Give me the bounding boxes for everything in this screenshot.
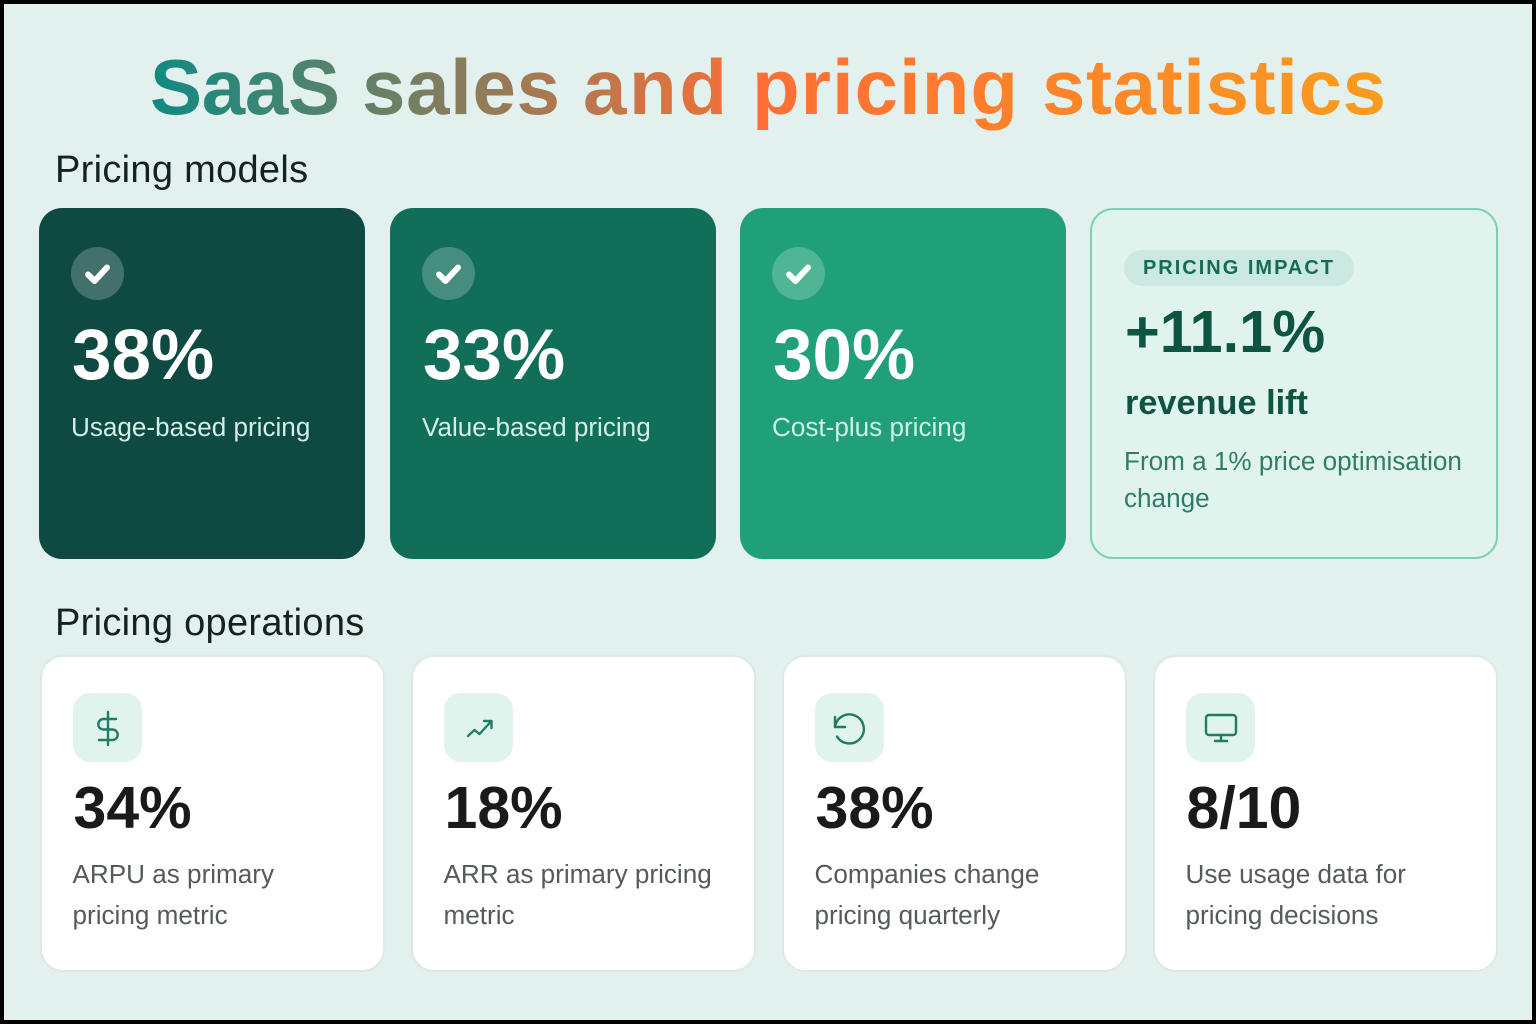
heading: pricing models: Pricing models (55, 149, 308, 191)
stat: 34% (74, 775, 192, 841)
icon: check (772, 247, 825, 300)
label (72, 859, 274, 930)
label: Value-based pricing (422, 412, 651, 442)
panel: usage-based pricing (39, 208, 365, 559)
icon: check (422, 247, 475, 300)
icon: trend up (444, 693, 512, 762)
stat: 38% (72, 316, 214, 395)
icon: rotate (814, 693, 884, 762)
label (1186, 859, 1406, 930)
heading: pricing operations: Pricing operations (55, 602, 365, 644)
description (1124, 446, 1462, 513)
stat: 8/10 (1186, 775, 1301, 841)
stat: 38% (816, 775, 934, 841)
description: From a 1% price optimisation (1124, 446, 1462, 476)
title (150, 43, 1386, 131)
label (814, 859, 1039, 930)
panel: ARPU (40, 655, 384, 972)
subhead: revenue lift (1125, 384, 1308, 422)
label: pricing metric (72, 900, 228, 930)
panel: ARR (410, 655, 756, 972)
panel: usage data (1152, 655, 1498, 972)
label: ARPU as primary (72, 859, 274, 889)
label: Cost-plus pricing (772, 412, 966, 442)
stat: 33% (423, 316, 565, 395)
stat: 18% (444, 775, 563, 841)
title: pricing (752, 43, 1018, 131)
label: Usage-based pricing (71, 412, 310, 442)
panel: value-based pricing (390, 208, 716, 559)
panel: quarterly changes (782, 655, 1126, 972)
label: pricing decisions (1186, 900, 1378, 930)
label: Use usage data for (1186, 859, 1406, 889)
label (444, 859, 712, 930)
icon: check (71, 247, 124, 300)
badge: PRICING IMPACT (1143, 257, 1335, 279)
badge (1124, 250, 1354, 286)
panel: pricing impact (1090, 208, 1498, 559)
label: Companies change (814, 859, 1039, 889)
stat: 30% (773, 316, 915, 395)
icon: dollar (72, 693, 142, 762)
stat: +11.1% (1125, 298, 1325, 365)
title: SaaS (150, 43, 340, 131)
icon: monitor (1186, 693, 1254, 762)
title: statistics (1042, 43, 1386, 131)
label: pricing quarterly (814, 900, 1000, 930)
title: sales (362, 43, 560, 131)
description: change (1124, 483, 1210, 513)
title: and (583, 43, 727, 131)
panel: cost-plus pricing (740, 208, 1066, 559)
label: ARR as primary pricing (444, 859, 712, 889)
label: metric (444, 900, 515, 930)
